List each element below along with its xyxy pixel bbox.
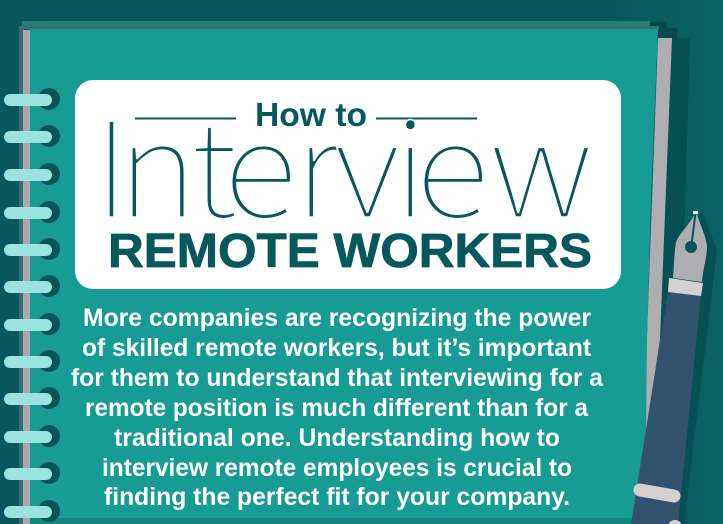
intro paragraph: remote position is much different than for a bbox=[85, 394, 589, 422]
intro paragraph: More companies are recognizing the power bbox=[83, 304, 591, 332]
heading: Interview: Interview bbox=[94, 64, 593, 255]
intro paragraph: of skilled remote workers, but it’s important bbox=[82, 334, 592, 362]
intro paragraph: traditional one. Understanding how to bbox=[114, 424, 560, 452]
intro paragraph: interview remote employees is crucial to bbox=[102, 454, 572, 482]
intro paragraph: finding the perfect fit for your company. bbox=[104, 483, 570, 511]
heading: Remote Workers: REMOTE WORKERS bbox=[108, 225, 592, 278]
intro paragraph bbox=[71, 304, 604, 511]
icon: fountain pen bbox=[631, 211, 717, 524]
title card bbox=[75, 64, 621, 289]
spiral binding bbox=[4, 88, 60, 522]
intro paragraph: for them to understand that interviewing for a bbox=[71, 364, 604, 392]
heading: How to: How to bbox=[255, 96, 367, 133]
